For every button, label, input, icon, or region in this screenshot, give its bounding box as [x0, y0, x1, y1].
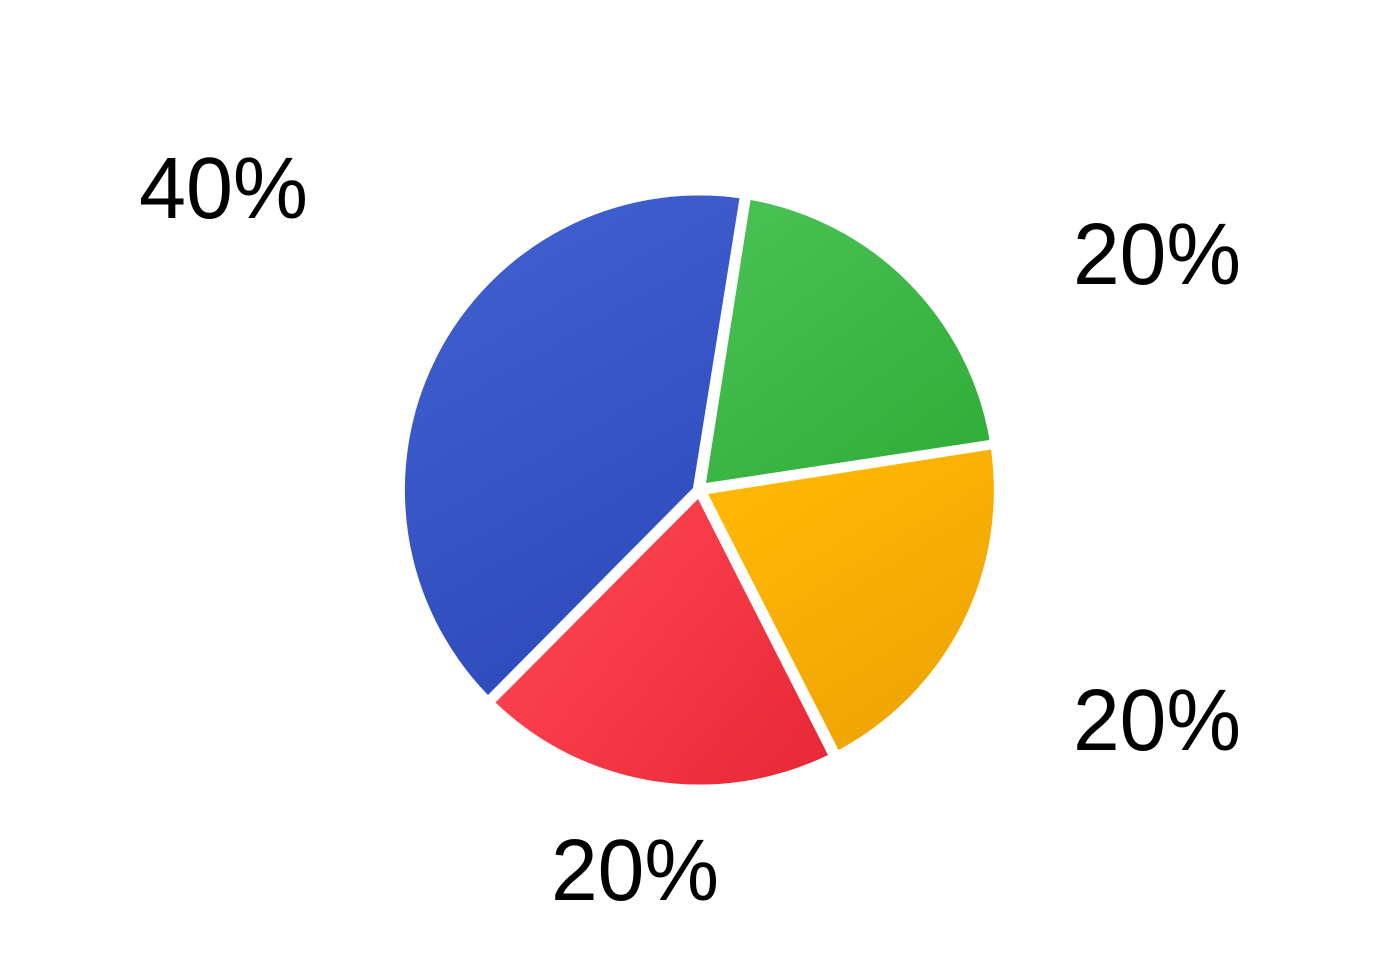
label: 20% bottom: 20%: [551, 822, 719, 919]
slice: yellow 20%: [708, 450, 994, 750]
label: 40%: 40%: [139, 140, 308, 237]
slice: green 20%: [706, 200, 990, 483]
slice: red 20%: [496, 499, 828, 785]
label: 20% bottom right: 20%: [1073, 672, 1241, 769]
label: 20% top right: 20%: [1073, 206, 1241, 303]
slice: blue 40%: [405, 195, 740, 695]
